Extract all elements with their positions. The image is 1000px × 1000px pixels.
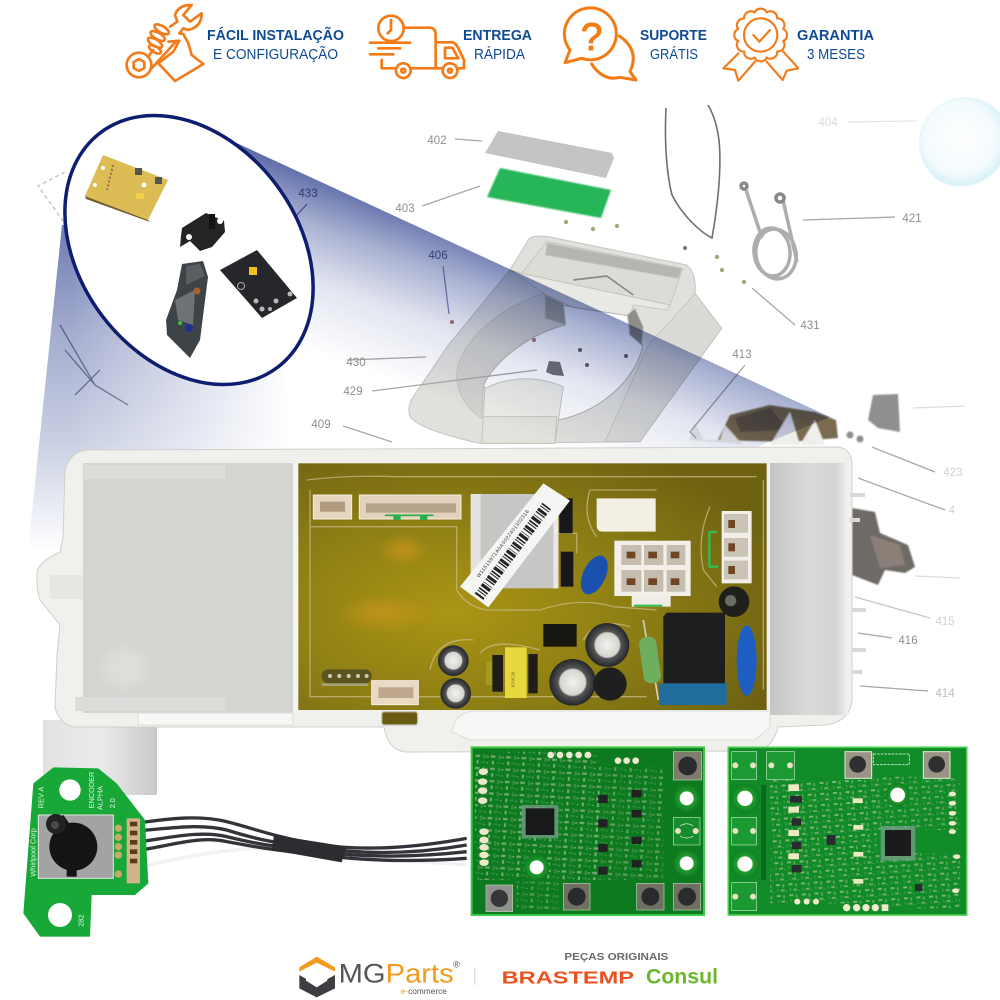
circle outline	[13, 67, 365, 433]
part: relay block assembly	[166, 261, 208, 358]
part numbers: 4	[949, 505, 956, 517]
Brastemp logo: BRASTEMP	[502, 967, 634, 987]
part numbers: 403	[395, 203, 415, 215]
frame outer body	[409, 236, 722, 443]
light smd labels	[788, 784, 863, 884]
divider slot	[761, 785, 766, 880]
encoder metal body	[38, 815, 113, 878]
part numbers: 406	[428, 250, 448, 262]
green pcb	[23, 767, 148, 937]
part: black encoder mount	[180, 213, 225, 251]
leader lines and numbers	[296, 117, 965, 700]
component field	[770, 777, 960, 908]
dark diodes	[790, 796, 922, 891]
label: easy installation: FÁCIL INSTALAÇÃO	[207, 26, 344, 44]
label: fast delivery: RÁPIDA	[474, 46, 525, 63]
front strip	[510, 270, 670, 316]
power transistors	[559, 498, 573, 587]
MGParts logo	[299, 957, 460, 997]
blue disc capacitor	[737, 625, 757, 696]
board divider wall	[293, 463, 298, 713]
solder pads	[115, 825, 122, 878]
three pin connector	[709, 511, 752, 583]
silk text: Whirlpool Corp	[29, 828, 38, 877]
part numbers: 423	[943, 467, 963, 479]
feature: easy installation	[127, 5, 344, 81]
part numbers: 416	[898, 635, 918, 647]
part numbers: 421	[902, 213, 922, 225]
clips on right side	[850, 495, 866, 672]
reflective traces	[307, 476, 763, 697]
label: easy installation: E CONFIGURAÇÃO	[213, 46, 338, 63]
white component box	[597, 498, 656, 532]
small transformer	[486, 647, 538, 698]
heatsink	[471, 494, 558, 588]
feature: fast delivery	[370, 16, 533, 78]
leader lines	[296, 121, 965, 691]
control recess	[522, 242, 683, 305]
left compartment reflection	[103, 648, 147, 688]
label: fast delivery: ENTREGA	[463, 28, 533, 44]
programming pads	[322, 669, 372, 686]
original parts caption: PEÇAS ORIGINAIS	[564, 952, 669, 963]
board base	[728, 747, 967, 915]
icon: speech bubbles with question mark: ?	[581, 16, 602, 59]
mounting holes	[524, 785, 700, 880]
part: hose 421	[741, 183, 800, 282]
silk text	[29, 772, 117, 927]
part: green board 403	[487, 168, 611, 218]
dark diodes	[598, 790, 642, 875]
part: yellow board	[85, 155, 168, 222]
tact switches	[845, 752, 950, 778]
lower connector	[372, 681, 418, 705]
black wires	[140, 818, 467, 861]
right empty compartment	[770, 463, 848, 715]
small transformer: JCMCM	[510, 671, 515, 688]
right keypad board	[728, 747, 967, 915]
part numbers	[298, 117, 963, 700]
encoder board with wires	[23, 767, 467, 937]
lower lip of housing	[138, 711, 770, 740]
heat shrink sleeve	[272, 835, 347, 862]
small connector	[313, 495, 352, 519]
silk text: REV A	[36, 787, 45, 808]
black rectangular component	[543, 624, 577, 647]
housing feet	[43, 720, 157, 795]
part: pale drum globe 404	[919, 97, 1000, 189]
hexagon logo mark	[299, 957, 335, 997]
part numbers: 413	[732, 349, 752, 361]
part: washer top frame 430	[409, 236, 722, 443]
right inner flap	[627, 308, 643, 345]
board base	[298, 463, 767, 710]
part numbers: 404	[818, 117, 838, 129]
part numbers: 414	[935, 688, 955, 700]
left compartment bottom rib	[75, 697, 225, 711]
microcontroller chip	[522, 805, 558, 838]
relay	[663, 613, 725, 683]
electrolytic capacitors	[438, 623, 629, 709]
icon: delivery truck with clock	[370, 16, 464, 78]
mounting holes	[730, 783, 910, 879]
icon: rosette badge with check	[723, 9, 798, 81]
silk text: ENCODER	[87, 772, 96, 808]
microcontroller chip	[881, 826, 915, 861]
part: door gasket wire	[665, 105, 720, 238]
vertical divider	[474, 968, 475, 985]
silk text: 282	[76, 914, 85, 927]
inner ring	[457, 293, 565, 418]
label: free support: GRÁTIS	[650, 46, 698, 63]
label: warranty: GARANTIA	[797, 28, 875, 44]
left inner flap	[545, 295, 566, 325]
frame right side shade	[605, 293, 722, 442]
label: free support	[640, 28, 707, 63]
e-commerce tagline: e-commerce	[401, 986, 447, 996]
touch pad box	[673, 817, 700, 845]
component field	[475, 752, 663, 910]
footer logos	[299, 952, 718, 997]
part numbers: 415	[935, 616, 955, 628]
housing outer shell	[37, 447, 852, 752]
label: easy installation	[207, 26, 344, 63]
part: small screws	[450, 220, 746, 367]
label: warranty: 3 MESES	[807, 47, 865, 63]
feature strip	[127, 5, 875, 81]
part numbers: 433	[298, 188, 318, 200]
label: warranty	[797, 28, 875, 63]
green resistor	[638, 620, 662, 700]
six pin connector	[614, 541, 691, 607]
tact switches	[486, 752, 702, 912]
cream pads row	[478, 752, 639, 866]
recess wiring	[573, 276, 633, 295]
wordmark: MGParts	[339, 958, 454, 988]
left keypad board	[472, 747, 704, 915]
part: control panel cover 402	[485, 131, 614, 178]
part numbers: 429	[343, 386, 363, 398]
white wire	[135, 848, 467, 868]
front stand	[482, 379, 563, 443]
serial number: W11515971A0A0022401302316	[476, 509, 531, 579]
Consul logo: Consul	[646, 965, 718, 989]
touch pad boxes	[732, 752, 794, 911]
highlight cone left part	[30, 225, 266, 534]
black knob	[46, 814, 97, 877]
warm glow patches	[337, 533, 430, 633]
icon: wrench and hand	[127, 5, 203, 81]
part: pump assembly brown	[690, 394, 900, 445]
mounting holes	[48, 779, 81, 927]
part: dashed wire left	[38, 172, 65, 222]
left compartment top rib	[84, 465, 225, 479]
feature: free support	[564, 8, 707, 80]
stand lower	[482, 417, 557, 443]
faded exploded parts diagram	[38, 97, 1000, 700]
pin header	[873, 754, 909, 765]
opening of frame	[483, 305, 643, 420]
zoom circle with parts	[13, 67, 365, 433]
barcode label	[460, 483, 570, 607]
part numbers: 409	[311, 419, 331, 431]
cutout slot	[382, 712, 418, 725]
board base	[472, 747, 704, 915]
wire connector	[127, 818, 140, 883]
silk text: ALPHA	[96, 786, 105, 810]
part: cable inside cone	[60, 325, 128, 405]
wire bundle	[135, 818, 467, 868]
part numbers: 402	[427, 135, 447, 147]
part: small motor assembly 429	[546, 361, 564, 376]
barcode bars	[479, 506, 547, 597]
left empty compartment	[83, 463, 293, 713]
side and bottom pads	[794, 792, 960, 911]
part: motor 415 side	[852, 508, 915, 585]
notch clip	[50, 575, 83, 599]
blue film capacitor	[659, 683, 727, 705]
feature: warranty	[723, 9, 875, 81]
label: fast delivery	[463, 28, 533, 63]
washer control box housing	[37, 447, 866, 795]
long connector	[359, 495, 461, 520]
highlight cone right part	[150, 140, 830, 470]
part numbers: 431	[800, 320, 820, 332]
part: dark board	[220, 250, 297, 318]
blue capacitor small	[575, 551, 613, 599]
part numbers: 430	[346, 357, 366, 369]
recess back wall	[545, 243, 682, 278]
varistor black round	[719, 586, 749, 617]
icon: speech bubbles with question mark	[564, 8, 636, 80]
label: free support: SUPORTE	[640, 28, 707, 44]
main control board	[298, 463, 767, 725]
silk text: 2.0	[108, 798, 117, 808]
registered mark: ®	[453, 959, 460, 969]
